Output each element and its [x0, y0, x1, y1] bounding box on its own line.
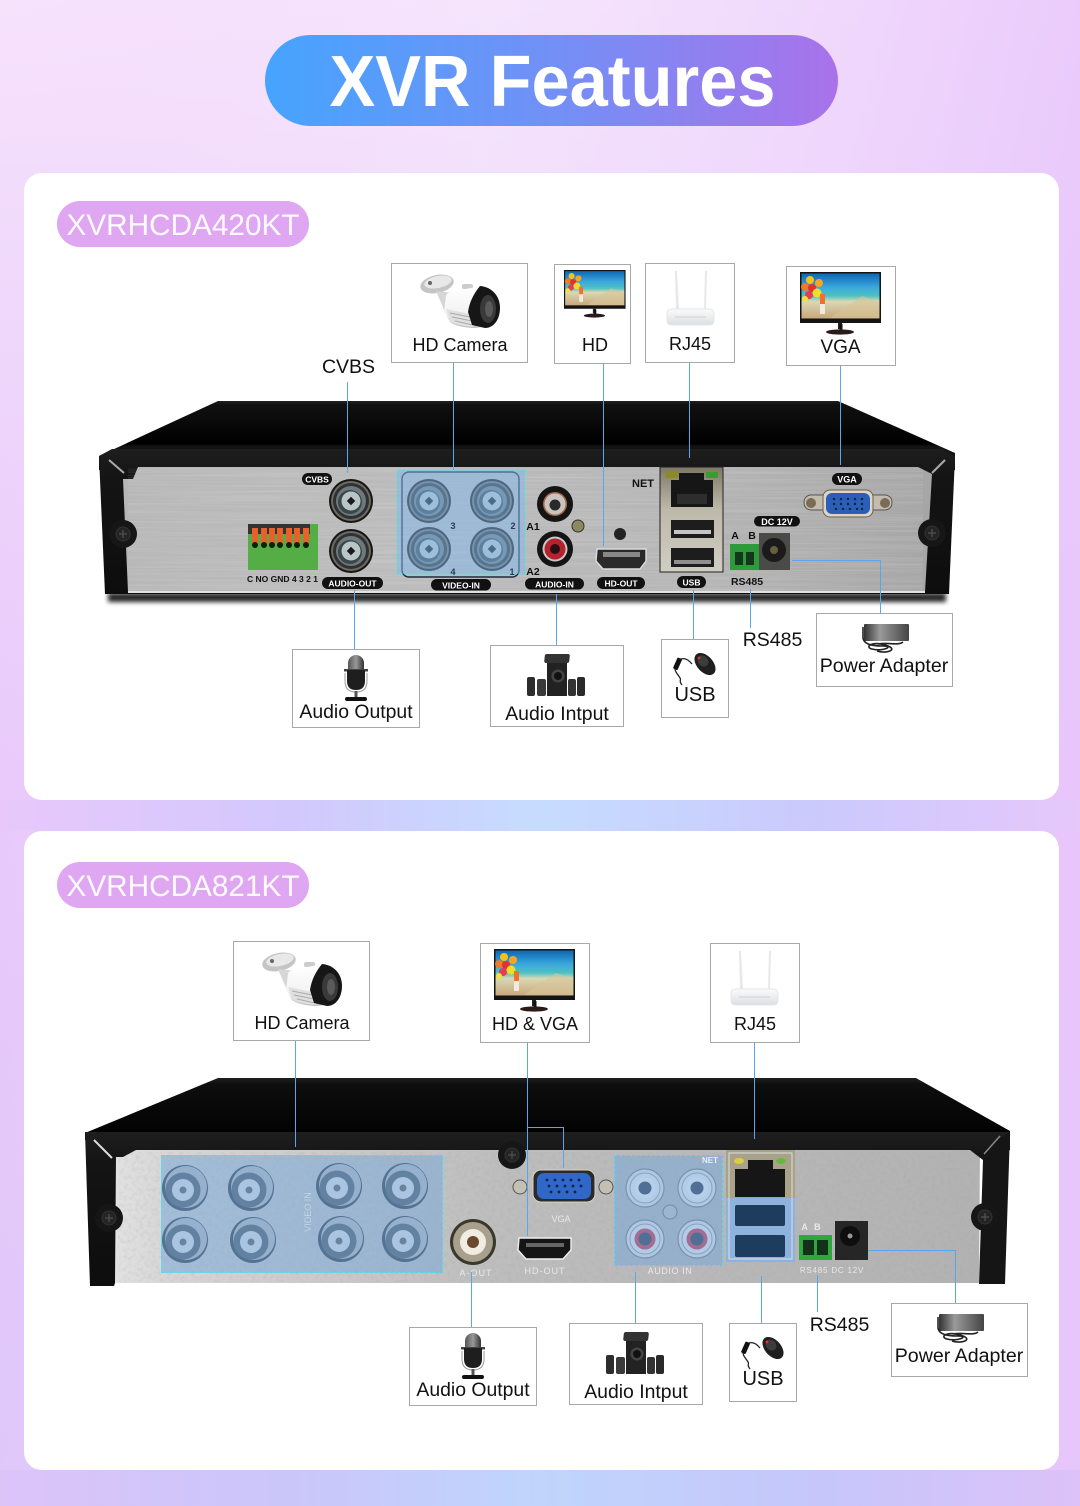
label box: VGA: VGA [820, 337, 861, 358]
connector: HD-OUT: HD-OUT [524, 1266, 566, 1276]
label box: HD: HD [582, 335, 608, 355]
label: RS485: RS485 [743, 629, 802, 651]
label: CVBS: CVBS [322, 356, 375, 378]
label box: Audio Output [292, 650, 420, 728]
connector: RS485: B [748, 530, 756, 542]
connector: RS485: RS485 [731, 576, 763, 588]
label box: Audio Output: Audio Output [299, 701, 413, 723]
label box: VGA [786, 266, 896, 366]
connector: RS485 and DC: A B [801, 1222, 823, 1232]
label box: RJ45: RJ45 [669, 334, 711, 354]
connector: VIDEO-IN: VIDEO-IN [442, 580, 480, 590]
connector: NET and USB ports [632, 467, 723, 588]
connector: VIDEO-IN: 2 [510, 521, 516, 531]
connector: NET and USB ports [702, 1150, 795, 1262]
alarm terminal block [247, 524, 318, 584]
connector: AUDIO-IN: A1 [526, 521, 540, 533]
connector: audio inputs: AUDIO IN [648, 1266, 692, 1276]
label box: RJ45 [710, 944, 800, 1042]
recorder rear panel [99, 401, 955, 602]
panel: XVRHCDA420KT [24, 173, 1059, 800]
label box: Power Adapter [892, 1304, 1028, 1376]
model badge: XVRHCDA821KT: XVRHCDA821KT [66, 870, 300, 903]
connector: AUDIO-OUT [322, 529, 383, 589]
connector: VIDEO-IN [397, 470, 525, 590]
label box: HD & VGA [480, 944, 590, 1042]
connector: NET and USB ports: NET [632, 478, 654, 490]
connector: AUDIO-IN [525, 486, 584, 590]
connector: video inputs: VIDEO IN [303, 1192, 313, 1232]
connector: VIDEO-IN: 3 [450, 521, 456, 531]
model badge: XVRHCDA821KT [57, 862, 309, 908]
label box: HD Camera: HD Camera [412, 335, 508, 355]
label box: Power Adapter [816, 614, 952, 686]
label box: USB [662, 640, 728, 718]
connector: CVBS [302, 473, 373, 523]
connector: VGA [513, 1170, 613, 1224]
connector: AUDIO-IN: A2 [526, 566, 540, 578]
connector lines [348, 363, 880, 649]
label box: Power Adapter: Power Adapter [895, 1345, 1024, 1367]
model badge: XVRHCDA420KT [57, 201, 309, 247]
model badge: XVRHCDA420KT: XVRHCDA420KT [66, 209, 300, 242]
connector: CVBS: CVBS [305, 474, 329, 484]
connector lines [296, 1041, 956, 1327]
label box: Power Adapter: Power Adapter [820, 655, 949, 677]
connector: RS485 and DC: RS485 DC 12V [800, 1266, 864, 1275]
label box: HD Camera [392, 264, 528, 362]
label box: HD & VGA: HD & VGA [492, 1014, 578, 1034]
connector: HD-OUT: HD-OUT [604, 578, 638, 588]
label box: Audio Intput [570, 1324, 702, 1404]
connector: A-OUT [450, 1219, 496, 1278]
label box: USB [730, 1324, 796, 1402]
label box: HD Camera [234, 942, 370, 1040]
connector: VGA [804, 473, 892, 517]
connector: RS485 [730, 530, 763, 588]
label box: Audio Intput: Audio Intput [505, 703, 609, 725]
connector: AUDIO-IN: AUDIO-IN [535, 580, 574, 590]
connector: video inputs [161, 1155, 443, 1273]
connector: HD-OUT [596, 528, 646, 589]
connector: A-OUT: A-OUT [460, 1268, 492, 1278]
alarm terminal block: C NO GND 4 3 2 1 [247, 574, 318, 584]
label box: Audio Output [410, 1328, 536, 1406]
label box: Audio Output: Audio Output [416, 1379, 530, 1401]
label box: USB: USB [742, 1368, 784, 1390]
label box: RJ45: RJ45 [734, 1014, 776, 1034]
connector: HD-OUT [518, 1238, 571, 1276]
connector: NET and USB ports: NET [702, 1156, 718, 1165]
panel: XVRHCDA821KT [24, 831, 1059, 1470]
label: RS485: RS485 [810, 1314, 869, 1336]
connector: audio inputs [614, 1155, 723, 1276]
label box: HD [554, 264, 630, 364]
connector: RS485 and DC [799, 1221, 868, 1275]
connector: VIDEO-IN: 4 [450, 567, 456, 577]
connector: VGA: VGA [551, 1214, 571, 1224]
connector: DC 12V [754, 516, 800, 570]
connector: DC 12V: DC 12V [761, 517, 793, 527]
label box: Audio Intput: Audio Intput [584, 1381, 688, 1403]
label box: HD Camera: HD Camera [254, 1013, 350, 1033]
connector: VGA: VGA [837, 474, 857, 484]
label box: USB: USB [674, 684, 716, 706]
title: XVR Features [330, 41, 776, 122]
connector: VIDEO-IN: 1 [509, 567, 515, 577]
connector: RS485: A [731, 530, 739, 542]
label box: Audio Intput [490, 646, 624, 726]
connector: NET and USB ports: USB [683, 578, 700, 588]
connector: AUDIO-OUT: AUDIO-OUT [328, 578, 377, 588]
label box: RJ45 [646, 264, 734, 362]
recorder rear panel [85, 1078, 1010, 1286]
